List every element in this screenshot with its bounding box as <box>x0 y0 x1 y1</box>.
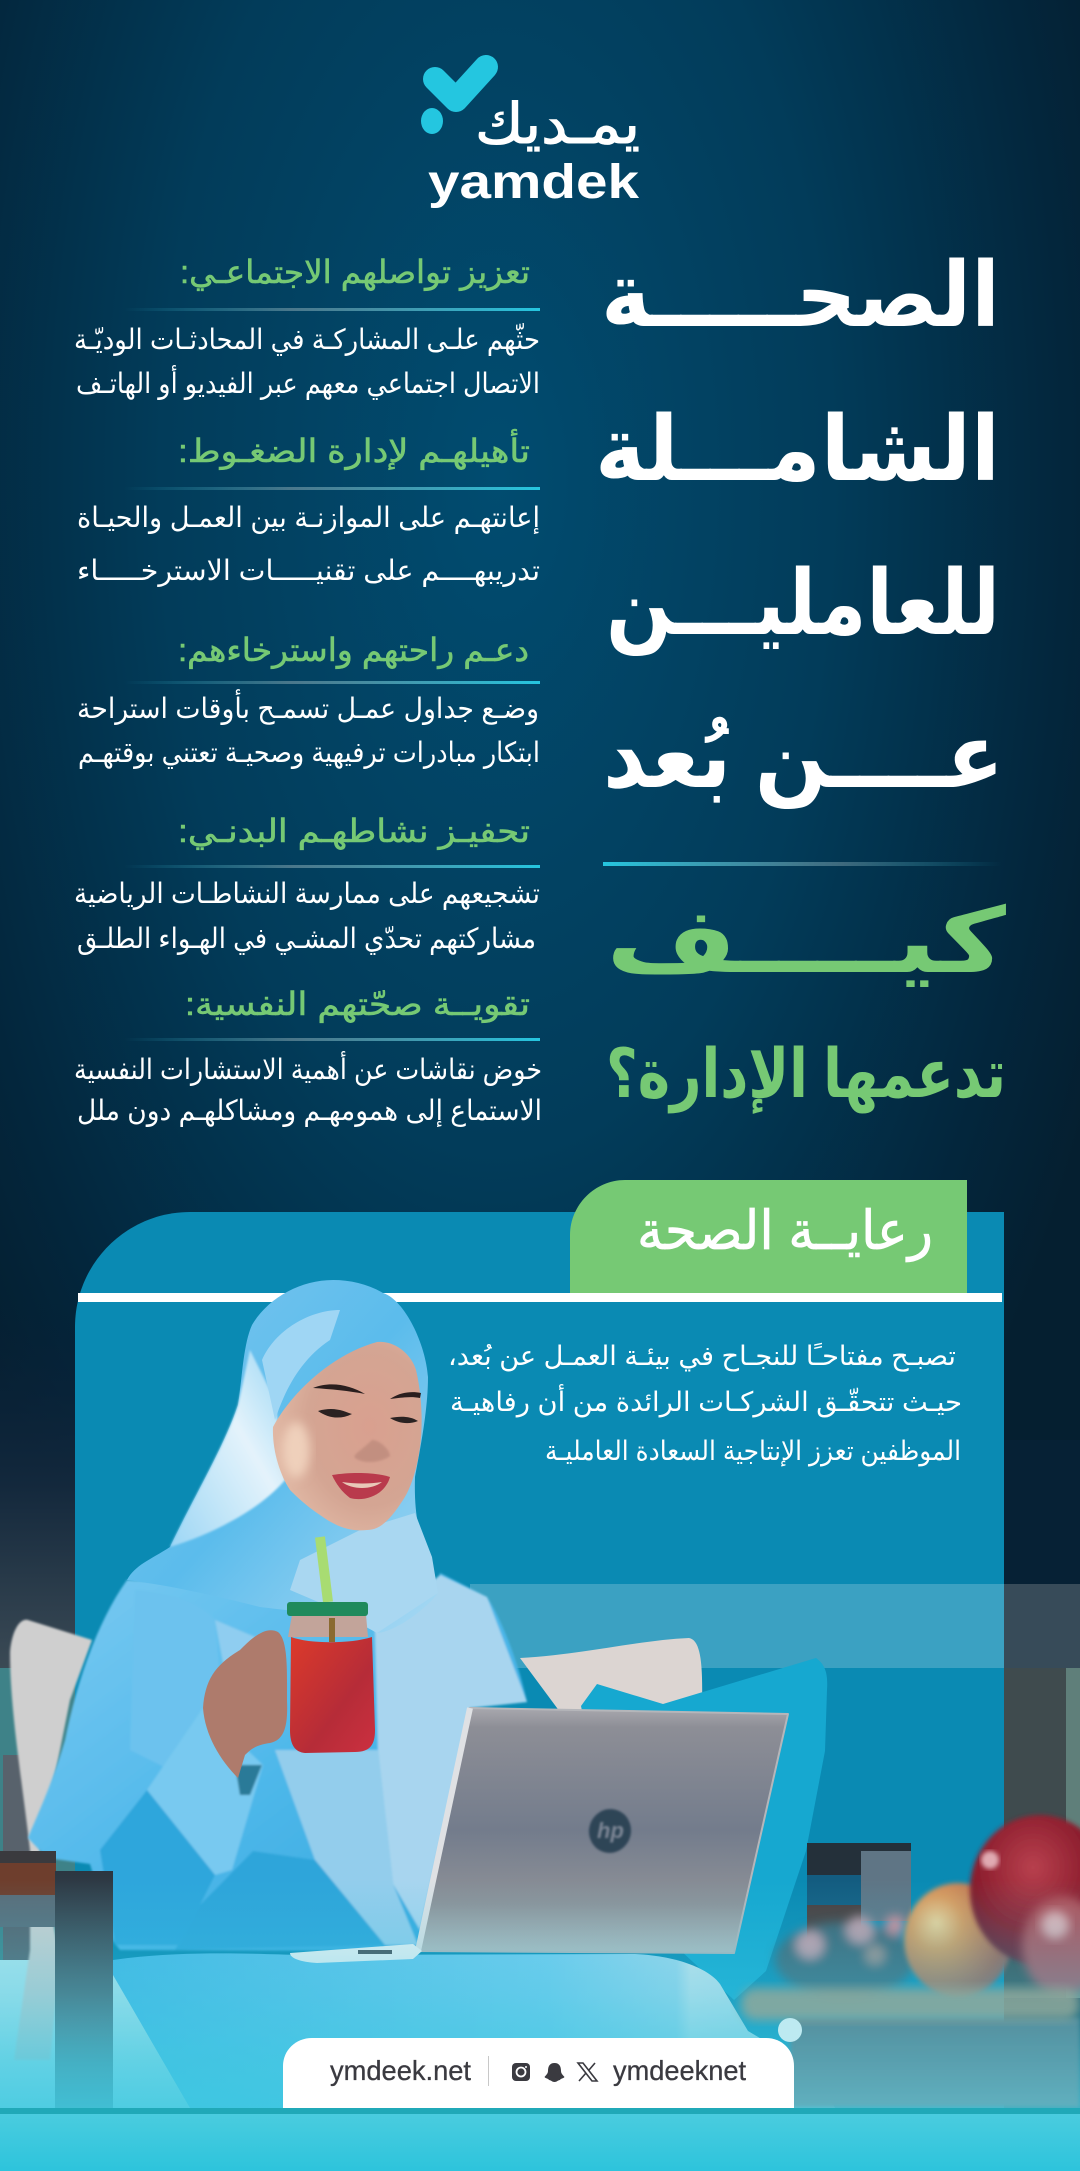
hand <box>203 1630 287 1778</box>
right chair arm <box>807 1843 911 1950</box>
subtitle question <box>606 892 1007 1114</box>
light floor cushion <box>0 1960 300 2108</box>
panel intro text: الموظفين تعزز الإنتاجية السعادة العامليـة <box>545 1436 961 1467</box>
plate <box>741 1988 1080 2020</box>
logo <box>421 67 640 209</box>
title: الصحـــــة <box>601 246 1000 346</box>
section: physical activity: تشجيعهم على ممارسة النشاطـات الرياضية <box>74 878 540 910</box>
section: physical activity: مشاركتهم تحدّي المشـي في الهـواء الطلـق <box>77 923 536 955</box>
logo latin wordmark: yamdek <box>428 156 639 209</box>
section: social connection <box>74 254 540 400</box>
panel rule <box>78 1293 1002 1302</box>
lips <box>332 1473 390 1499</box>
robe <box>28 1573 527 1951</box>
icon: logo dot <box>421 108 443 134</box>
section: social connection: تعزيز تواصلهم الاجتماعـي: <box>180 254 530 291</box>
section: rest and relaxation: دعـم راحتهم واسترخاءهم: <box>178 632 529 669</box>
icon: instagram <box>512 2063 530 2081</box>
eyebrows <box>313 1384 421 1399</box>
section: social connection: الاتصال اجتماعي معهم عبر الفيديو أو الهاتـف <box>76 364 540 400</box>
section: mental health: خوض نقاشات عن أهمية الاستشارات النفسية <box>74 1050 542 1086</box>
section: rest and relaxation: ابتكار مبادرات ترفيهية وصحيـة تعتني بوقتهـم <box>78 737 540 769</box>
section: mental health <box>74 986 542 1127</box>
jar <box>287 1602 375 1753</box>
panel tab heading: رعايــة الصحة <box>637 1201 933 1262</box>
icon: X <box>578 2063 597 2081</box>
fruit bowl table <box>741 1988 1080 2108</box>
logo arabic wordmark: يمـديك <box>475 92 640 155</box>
icon: check mark <box>435 67 486 100</box>
lap <box>113 1953 835 2108</box>
photo: woman with laptop <box>0 1280 1080 2171</box>
laptop base <box>290 1944 422 1963</box>
title <box>595 246 1004 809</box>
title: الشامـــلة <box>595 400 1000 500</box>
laptop <box>290 1708 788 1963</box>
orange apple <box>904 1883 1012 1997</box>
panel tab heading <box>570 1180 967 1293</box>
pink apple <box>1022 1896 1080 1996</box>
fruit <box>775 1815 1080 1998</box>
bokeh dot <box>778 2018 802 2042</box>
section: rest and relaxation <box>77 632 540 769</box>
section: rest and relaxation: وضـع جداول عمـل تسمـح بأوقات استراحة <box>77 688 539 725</box>
red apple <box>970 1815 1080 1965</box>
section: mental health: الاستماع إلى همومهـم ومشاكلهـم دون ملل <box>77 1095 542 1127</box>
laptop logo: hp <box>597 1818 624 1843</box>
rear cushion <box>520 1638 702 1712</box>
left white pillow <box>10 1620 92 2060</box>
website: ymdeek.net <box>330 2055 471 2086</box>
laptop logo <box>584 1804 636 1858</box>
panel intro text: تصبـح مفتاحـًا للنجـاح في بيئـة العمـل عن بُعد، <box>448 1341 956 1372</box>
nose <box>354 1440 390 1462</box>
left chair arm <box>0 1851 113 2171</box>
left chair back post <box>3 1755 31 1975</box>
title: عــــن بُعد <box>603 707 1004 809</box>
handle: ymdeeknet <box>613 2055 746 2086</box>
panel: health care background <box>75 1212 1004 2171</box>
face <box>273 1342 422 1530</box>
side backdrop strips <box>0 1300 1080 2108</box>
subtitle question: كيــــف <box>606 892 1007 992</box>
grapes <box>775 1915 915 1998</box>
footer band <box>0 2108 1080 2171</box>
section: social connection: حثّهم علـى المشاركـة في المحادثـات الوديّـة <box>74 323 540 356</box>
section: stress management: تأهيلهـم لإدارة الضغـوط: <box>178 429 530 470</box>
translucent band <box>470 1584 1080 1668</box>
section: stress management: إعانتهـم على الموازنـة بين العمـل والحيـاة <box>77 502 540 534</box>
icon: snapchat <box>544 2063 564 2082</box>
eyes <box>318 1409 418 1423</box>
section: physical activity <box>74 813 540 955</box>
section: mental health: تقويــة صحّتهم النفسية: <box>185 986 530 1023</box>
section: physical activity: تحفيـز نشاطهـم البدنـي: <box>178 813 530 850</box>
straw <box>320 1537 328 1602</box>
section: stress management: تدريبهــــم على تقنيـــــات الاسترخـــــاء <box>77 555 540 587</box>
table <box>790 2018 1080 2108</box>
title: للعامليـــن <box>606 554 1000 656</box>
hijab <box>127 1280 438 1633</box>
footer pill <box>283 2038 794 2108</box>
panel intro text: حيـث تتحقّـق الشركـات الرائدة من أن رفاهيـة <box>450 1383 962 1418</box>
title divider <box>603 862 1002 866</box>
panel intro text <box>448 1341 962 1467</box>
blue pillow <box>581 1658 827 2000</box>
section: stress management <box>77 429 540 587</box>
bottom fade <box>0 1880 1080 2108</box>
